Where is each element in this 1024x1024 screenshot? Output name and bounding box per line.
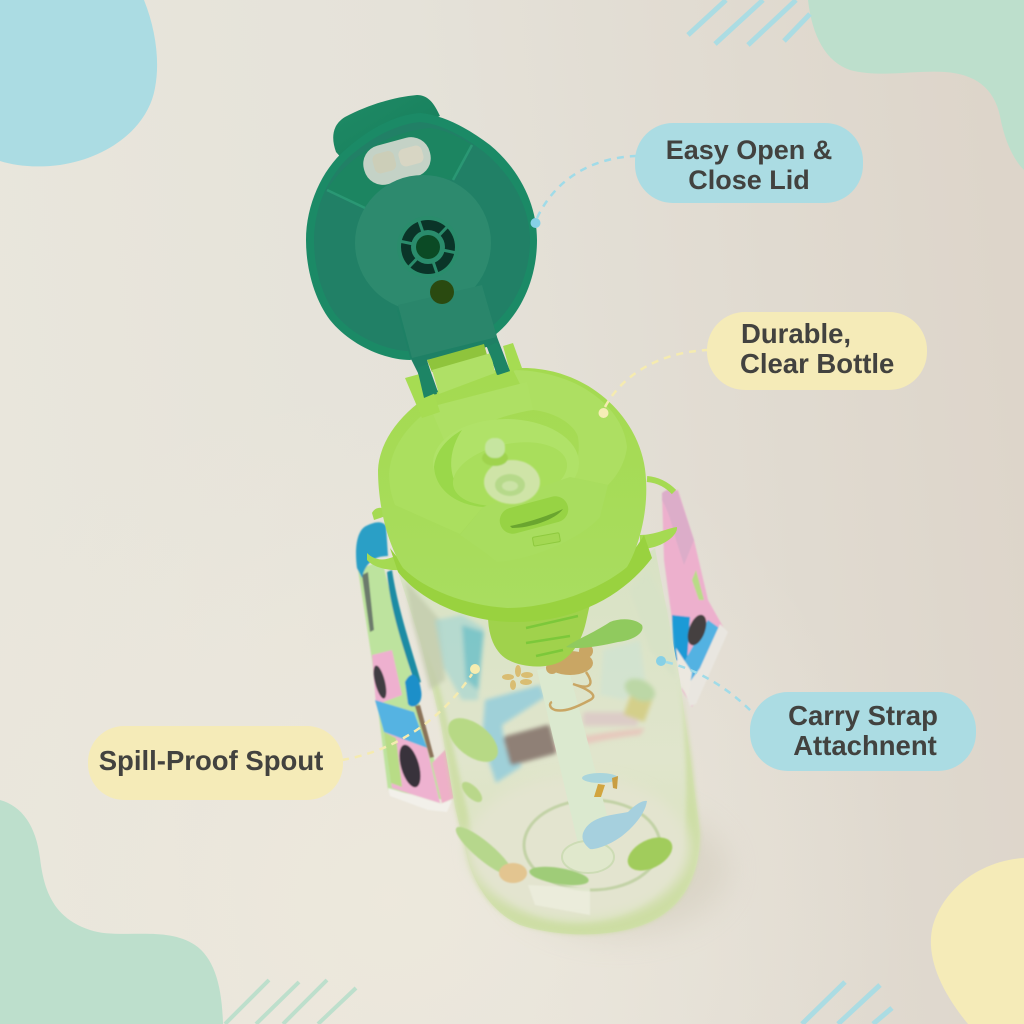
small rect <box>532 533 560 546</box>
small hole <box>430 280 454 304</box>
bottle base glass <box>466 776 690 920</box>
upper glass reflections <box>405 570 676 700</box>
straw <box>537 663 607 852</box>
lid top surface right <box>513 370 627 485</box>
decorative stripes: bottom left <box>225 980 356 1024</box>
lid lower surface <box>460 477 608 562</box>
lid well <box>433 419 579 507</box>
callout: easy open and close lid: Close Lid <box>688 165 810 195</box>
decorative blob: bottom right yellow <box>931 858 1024 1024</box>
right strap <box>662 489 728 707</box>
callout: carry strap attachment <box>656 656 976 771</box>
hinge <box>405 342 522 418</box>
lid top sector <box>327 128 472 208</box>
decorative blob: bottom left green <box>0 800 223 1024</box>
decorative stripes: bottom right <box>802 982 892 1024</box>
center hub <box>355 175 491 311</box>
straw base <box>562 841 614 873</box>
decorative stripes: top right <box>688 0 810 45</box>
arm blend <box>398 285 497 358</box>
flower print <box>502 665 533 690</box>
spout ribs <box>526 616 578 656</box>
leaf print <box>566 619 643 648</box>
channel <box>430 382 533 447</box>
lid inner surface <box>314 122 530 351</box>
lid top surface left <box>389 405 483 534</box>
fish print <box>582 801 647 849</box>
callout: easy open and close lid: Easy Open & <box>666 135 832 165</box>
collar <box>390 535 652 622</box>
lid tab <box>333 95 440 162</box>
left strap <box>356 522 454 812</box>
decorative blob: top left blue <box>0 0 157 166</box>
clear seal <box>359 133 435 189</box>
bottle base ring <box>524 800 660 890</box>
vent slot <box>497 493 571 537</box>
decorative blob: top right green <box>808 0 1024 170</box>
callout: durable clear bottle: Durable, <box>741 318 851 349</box>
callout: carry strap attachment: Attachnent <box>793 730 937 761</box>
lid ribs <box>327 145 472 208</box>
monkey print <box>546 644 593 711</box>
umbrella print <box>582 773 618 797</box>
bottle shadow <box>508 805 728 935</box>
bottle body <box>398 548 700 935</box>
light green lid <box>378 368 646 608</box>
callout: durable clear bottle <box>598 312 927 418</box>
callout: spill-proof spout: Spill-Proof Spout <box>99 745 323 776</box>
strap loops <box>367 479 677 570</box>
nozzle <box>397 216 459 278</box>
lid well crescent <box>434 430 490 507</box>
decorative leaves <box>440 710 678 915</box>
spout <box>488 595 592 667</box>
callout: carry strap attachment: Carry Strap <box>788 700 938 731</box>
printed picture band <box>482 674 659 783</box>
hinge arm <box>397 288 510 397</box>
lid outer shell <box>306 113 537 360</box>
callout: durable clear bottle: Clear Bottle <box>740 348 894 379</box>
dark green flip lid <box>306 95 537 397</box>
lid well floor <box>447 433 573 515</box>
bottle side edges <box>398 572 700 935</box>
callout: spill-proof spout <box>88 664 480 800</box>
silicone valve <box>482 438 540 504</box>
callout: easy open and close lid <box>530 123 863 228</box>
